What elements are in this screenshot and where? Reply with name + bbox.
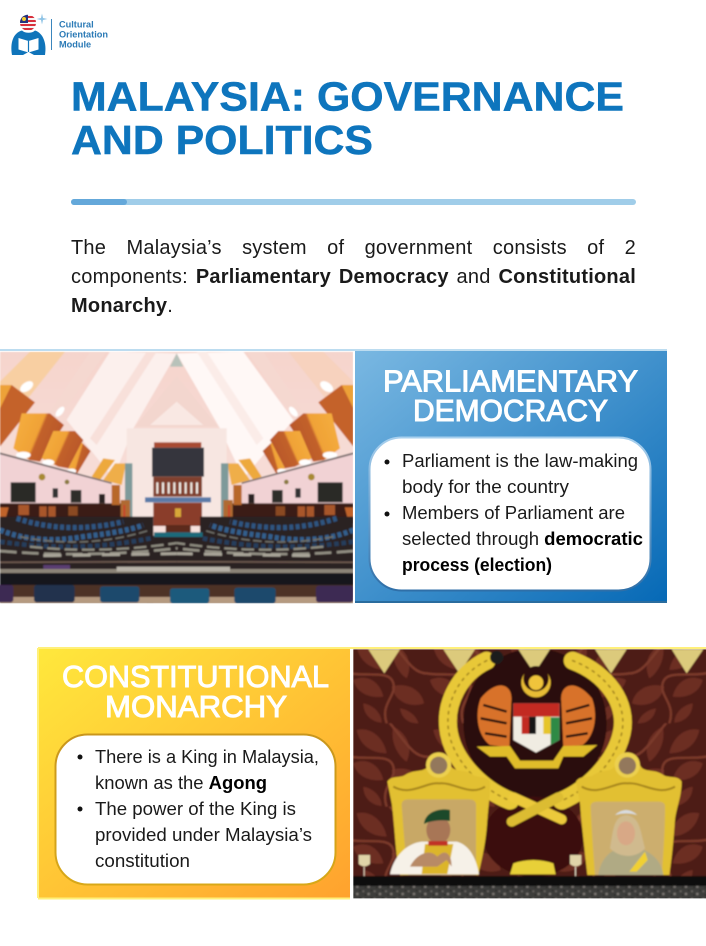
title: AND POLITICS: [71, 117, 373, 163]
text box: monarchy points: provided under Malaysia’s: [95, 825, 312, 845]
text block: introduction: Monarchy.: [71, 295, 173, 317]
title: MALAYSIA: GOVERNANCE: [71, 74, 624, 120]
heading: parliamentary democracy: DEMOCRACY: [413, 394, 608, 428]
text box: monarchy points: [56, 734, 336, 884]
heading: constitutional monarchy: MONARCHY: [105, 690, 287, 724]
heading: constitutional monarchy: CONSTITUTIONAL: [62, 660, 329, 694]
logo: Cultural Orientation Module: [11, 14, 108, 55]
heading: constitutional monarchy: [62, 660, 329, 724]
text box: parliament points: selected through democratic: [402, 529, 643, 549]
text box: parliament points: Members of Parliament are: [402, 503, 625, 523]
text box: monarchy points: There is a King in Malaysia,: [95, 747, 319, 767]
heading: parliamentary democracy: [383, 364, 638, 428]
text box: parliament points: [370, 438, 650, 590]
text box: monarchy points: known as the Agong: [95, 773, 267, 793]
text box: parliament points: body for the country: [402, 477, 569, 497]
text block: introduction: components: Parliamentary Democracy and Constitutional: [71, 266, 636, 288]
photo: king and queen on thrones: [350, 647, 706, 900]
title: [71, 74, 624, 163]
text box: parliament points: process (election): [402, 555, 552, 575]
text block: introduction: [71, 237, 636, 317]
progress divider: [71, 199, 636, 205]
panel: parliamentary democracy: [355, 350, 667, 602]
text box: monarchy points: The power of the King is: [95, 799, 296, 819]
heading: parliamentary democracy: PARLIAMENTARY: [383, 364, 638, 398]
logo text: Cultural: [59, 20, 94, 30]
panel: constitutional monarchy: [38, 648, 706, 898]
logo text: [59, 20, 108, 50]
text block: introduction: The Malaysia’s system of government consists of 2: [71, 237, 636, 259]
photo top edge: [0, 349, 667, 351]
icon: reader with flag head: [11, 14, 48, 55]
photo: parliament chamber: [0, 352, 353, 603]
text box: parliament points: Parliament is the law-making: [402, 451, 638, 471]
text box: monarchy points: constitution: [95, 851, 190, 871]
logo text: Module: [59, 40, 91, 50]
logo text: Orientation: [59, 30, 108, 40]
